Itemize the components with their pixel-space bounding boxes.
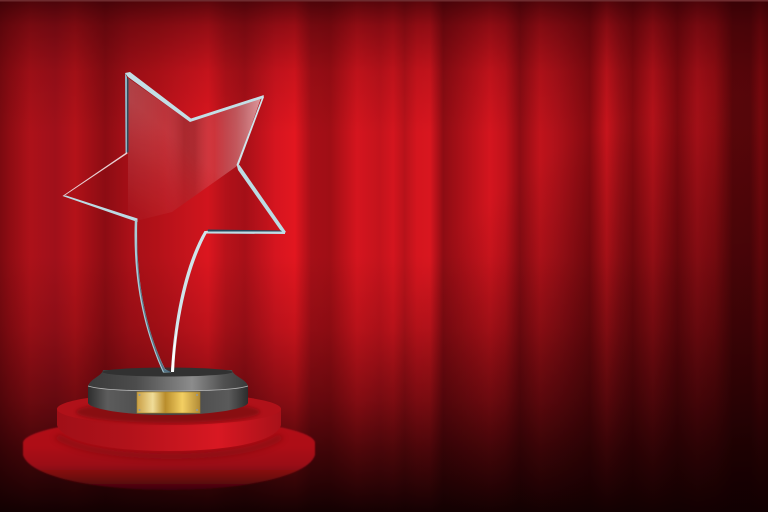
gold name plaque [137, 392, 200, 413]
lower podium tier [23, 418, 315, 490]
black trophy base [88, 368, 248, 415]
star edge highlights [62, 72, 286, 234]
star glass tint [63, 73, 285, 371]
upper podium tier [57, 393, 281, 451]
glass glare reflection [128, 78, 261, 221]
trophy stem edges [135, 220, 208, 372]
glass star trophy [62, 72, 286, 372]
